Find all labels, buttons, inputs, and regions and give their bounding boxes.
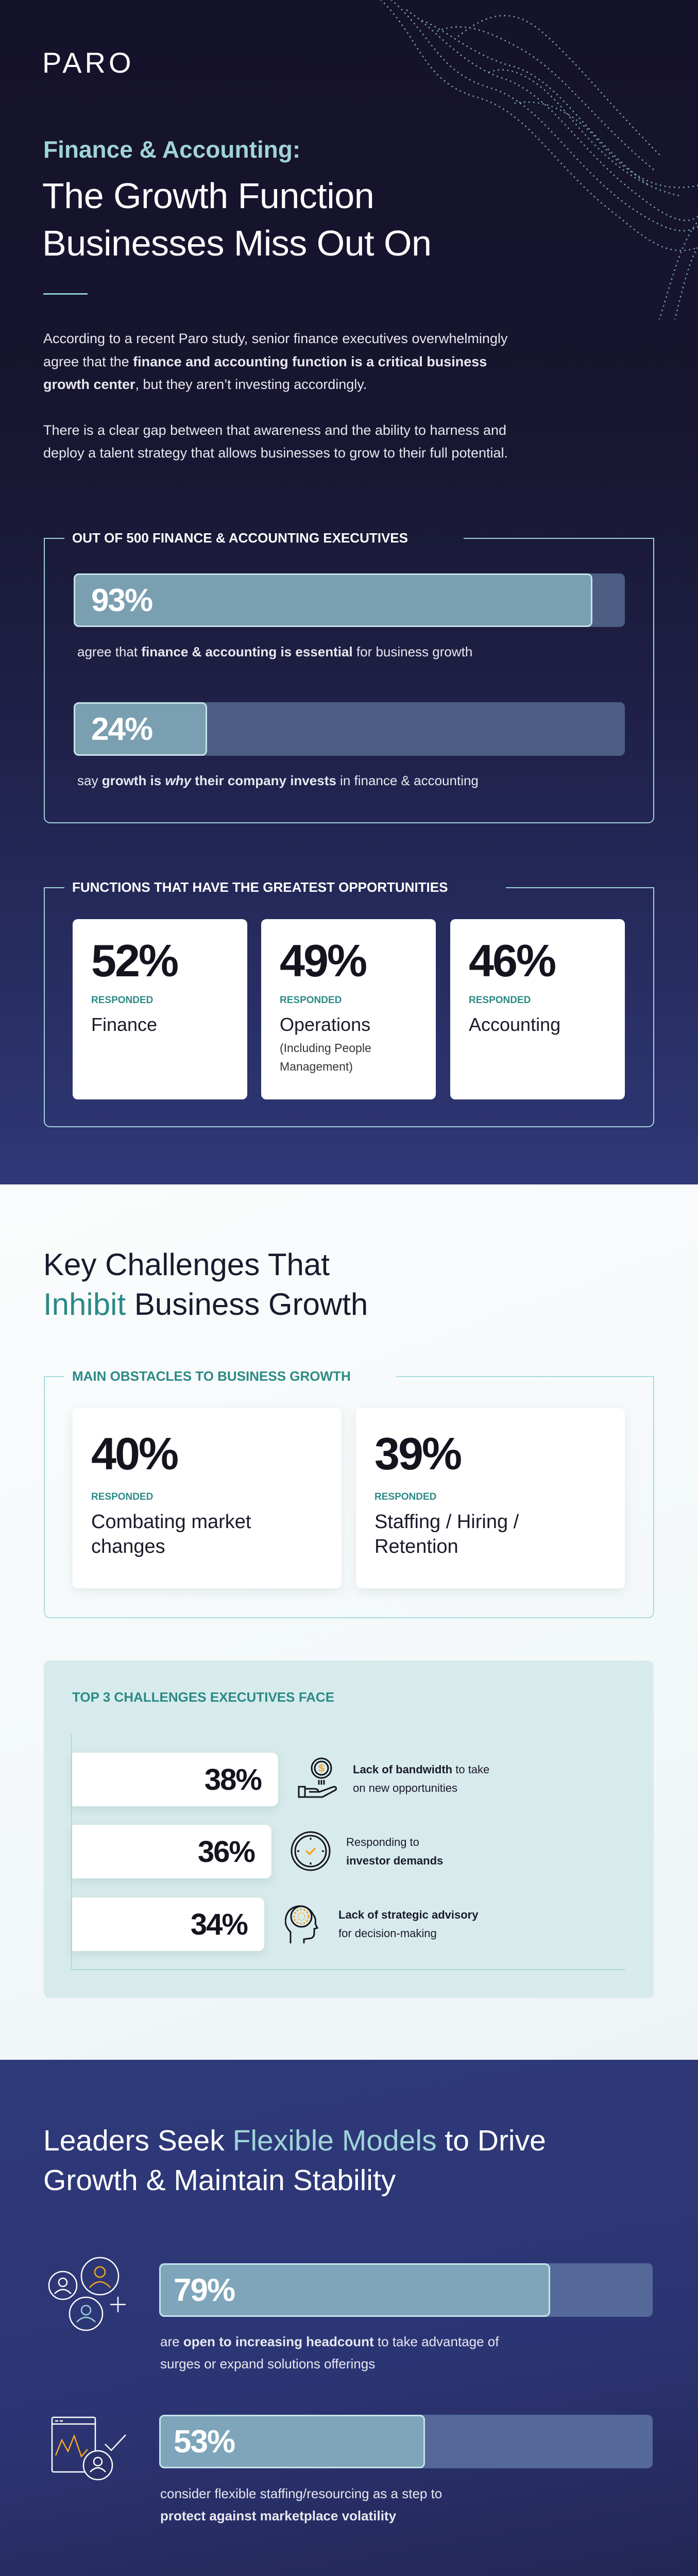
section: key challenges background [0,1184,698,2060]
heading: leaders seek flexible models: Growth & Maintain Stability [43,2164,396,2197]
intro text [43,331,508,461]
card: Finance 52%: Finance [91,1014,157,1035]
text: challenge 3: Lack of strategic advisory [338,1908,478,1921]
bar: 93%: 93% [91,582,152,618]
panel: top 3 challenges [44,1660,654,1998]
card: Operations 49%: Management) [280,1060,353,1073]
panel: functions with greatest opportunities [44,879,654,1127]
bar: 24%: 24% [91,711,152,747]
card: Accounting 46% [450,919,625,1099]
bar: 34% [72,1897,264,1951]
icon: coin in hand [298,1758,337,1798]
panel header: OUT OF 500 FINANCE & ACCOUNTING EXECUTIVES [72,530,408,546]
card: Operations 49%: Operations [280,1014,370,1035]
icon: clock [291,1831,331,1871]
text: 79% caption [160,2334,499,2371]
section: flexible models background [0,2060,698,2576]
intro text: There is a clear gap between that awareness and the ability to harness and [43,422,506,438]
card: Accounting 46%: Accounting [469,1014,560,1035]
panel header: FUNCTIONS THAT HAVE THE GREATEST OPPORTUNITIES [72,879,448,895]
bar: 53% [159,2415,653,2468]
card: Operations 49%: RESPONDED [280,995,342,1006]
card: Operations 49% [261,919,436,1099]
section: hero background [0,0,698,1184]
bar: 79%: 79% [174,2272,234,2308]
card: Accounting 46%: RESPONDED [469,995,531,1006]
card: 39% [356,1408,625,1588]
heading: leaders seek flexible models: Leaders Seek Flexible Models to Drive [43,2124,546,2157]
logo: PARO: PARO [42,46,134,79]
heading: key challenges: Key Challenges That [43,1247,330,1282]
card: Finance 52% [73,919,247,1099]
panel header: TOP 3 CHALLENGES EXECUTIVES FACE [72,1689,334,1705]
intro text: growth center, but they aren’t investing accordingly. [43,377,367,392]
intro text: deploy a talent strategy that allows businesses to grow to their full potential. [43,445,508,461]
bar: 53%: 53% [174,2424,234,2460]
icon: head with gear [285,1905,318,1943]
bar: 36% [72,1825,271,1878]
card: 40%: RESPONDED [91,1492,153,1502]
title: main heading: The Growth Function [42,176,374,216]
icon: people plus [48,2257,126,2331]
text: challenge 1: on new opportunities [353,1782,457,1794]
text: challenge 2: investor demands [346,1854,443,1867]
text: 24% caption: say growth is why their company invests in finance & accounting [77,773,479,788]
text: challenge 2: Responding to [346,1836,419,1849]
icon: chart with person [52,2416,126,2480]
panel header: MAIN OBSTACLES TO BUSINESS GROWTH [72,1368,351,1384]
text: 53% caption: consider flexible staffing/resourcing as a step to [160,2486,442,2501]
text: 79% caption: are open to increasing headcount to take advantage of [160,2334,499,2349]
title: main heading [42,176,431,263]
card: 40%: Combating market [91,1511,251,1533]
card: 39%: Retention [374,1536,458,1557]
text: challenge 1 [353,1763,489,1794]
intro text: According to a recent Paro study, senior finance executives overwhelmingly [43,331,507,346]
icon: coin in hand: $ [318,1763,325,1774]
bar: 38%: 38% [205,1763,261,1796]
card: Operations 49%: 49% [280,935,366,986]
heading: key challenges: Inhibit Business Growth [43,1287,368,1321]
text: challenge 3 [338,1908,478,1940]
text: 53% caption: protect against marketplace volatility [160,2508,396,2523]
text: 93% caption: agree that finance & accounting is essential for business growth [77,644,472,659]
panel: out of 500 executives [44,530,654,823]
bar: 36%: 36% [198,1835,254,1868]
bar: 38% [72,1753,278,1806]
card: 40%: 40% [91,1428,177,1479]
panel: main obstacles [44,1368,654,1618]
decorative dotted wave [380,0,698,319]
intro text: agree that the finance and accounting function is a critical business [43,353,487,369]
card: 39%: Staffing / Hiring / [374,1511,519,1533]
text: challenge 3: for decision-making [338,1927,437,1940]
card: 40%: changes [91,1536,165,1557]
heading: leaders seek flexible models [43,2124,546,2197]
heading: key challenges [43,1247,368,1321]
title: main heading: Businesses Miss Out On [42,223,431,263]
card: 39%: RESPONDED [374,1492,436,1502]
title: Finance & Accounting: Finance & Accounting: [43,136,300,163]
text: challenge 1: Lack of bandwidth to take [353,1763,489,1776]
bar: 34%: 34% [191,1907,247,1941]
bar: 24% [74,702,625,756]
card: Finance 52%: 52% [91,935,177,986]
card: Finance 52%: RESPONDED [91,995,153,1006]
text: 79% caption: surges or expand solutions offerings [160,2356,375,2371]
card: Accounting 46%: 46% [469,935,555,986]
bar: 79% [159,2263,653,2317]
text: challenge 2 [346,1836,443,1867]
card: 39%: 39% [374,1428,461,1479]
text: 53% caption [160,2486,442,2523]
card: 40% [73,1408,342,1588]
card: Operations 49%: (Including People [280,1041,371,1055]
bar: 93% [74,573,625,627]
